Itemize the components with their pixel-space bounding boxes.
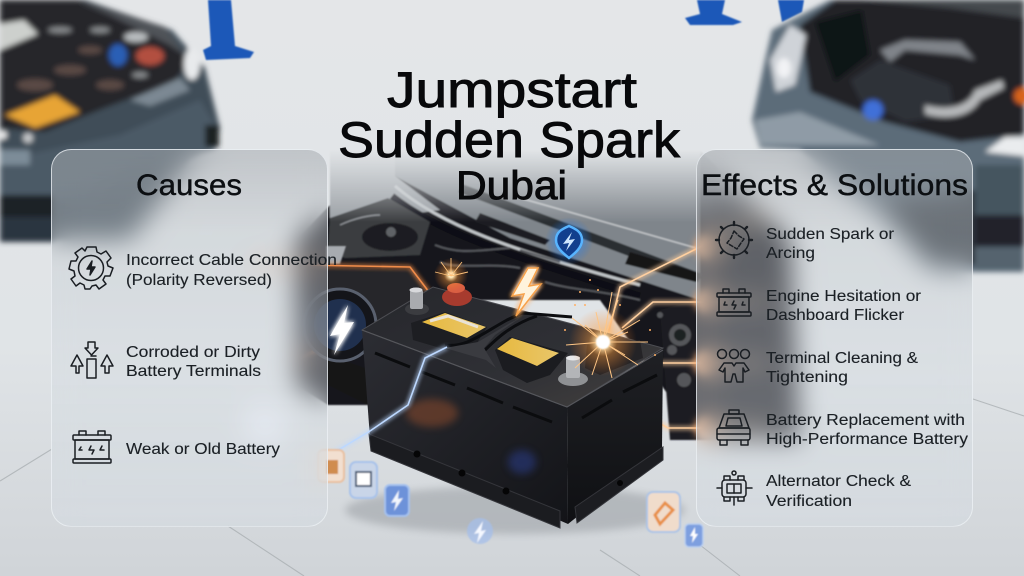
center lightning bolt xyxy=(512,268,541,316)
base ledges xyxy=(369,434,560,528)
heading: effects and solutions: Effects & Solutions xyxy=(701,169,968,202)
solution: terminal cleaning: Terminal Cleaning & xyxy=(766,350,918,367)
orange glows seen through the right panel xyxy=(694,235,720,440)
blue lift posts xyxy=(203,0,804,60)
solution: terminal cleaning: Tightening xyxy=(766,369,848,386)
solution: terminal cleaning xyxy=(718,350,918,386)
cause: incorrect cable connection: Incorrect Cable Connection xyxy=(126,252,337,269)
effect: engine hesitation: Engine Hesitation or xyxy=(766,288,922,305)
panel: causes xyxy=(51,149,328,527)
side faces xyxy=(362,330,568,524)
side lightning disc xyxy=(304,289,376,361)
car battery xyxy=(345,283,685,534)
cause: corroded terminals xyxy=(71,342,261,380)
large spark burst xyxy=(564,279,656,378)
solution: alternator check: Verification xyxy=(766,493,852,510)
effect: sudden spark: Sudden Spark or xyxy=(766,226,895,243)
terminal spark xyxy=(434,258,468,292)
cause: incorrect cable connection: (Polarity Reversed) xyxy=(126,272,272,289)
solution: battery replacement xyxy=(717,410,968,448)
soft glow under left panel xyxy=(243,403,287,447)
solution: alternator check xyxy=(717,471,911,510)
cause: incorrect cable connection xyxy=(69,247,337,289)
solution: alternator check: Alternator Check & xyxy=(766,473,911,490)
cause: corroded terminals: Battery Terminals xyxy=(126,363,261,380)
panel: effects and solutions xyxy=(696,149,973,527)
cause: corroded terminals: Corroded or Dirty xyxy=(126,344,260,361)
light patch behind spilled label text xyxy=(326,246,346,264)
right car xyxy=(752,0,1024,272)
cause: weak battery: Weak or Old Battery xyxy=(126,441,280,458)
floating floor icons xyxy=(318,450,703,547)
title: Sudden Spark xyxy=(338,112,681,168)
solution: battery replacement: High-Performance Battery xyxy=(766,431,968,448)
title: Dubai xyxy=(456,164,567,208)
connector strap xyxy=(445,313,572,345)
vents xyxy=(375,353,657,422)
engine bay xyxy=(296,150,800,440)
floor seams xyxy=(0,399,1024,576)
cause: weak battery xyxy=(73,431,280,463)
effect: sudden spark xyxy=(716,222,895,262)
blue shield bolt icon xyxy=(545,217,593,265)
solution: battery replacement: Battery Replacement with xyxy=(766,412,965,429)
left car xyxy=(0,0,220,242)
yellow labels xyxy=(422,313,486,338)
title: Jumpstart xyxy=(387,62,637,118)
effect: engine hesitation xyxy=(717,288,922,324)
raised covers xyxy=(411,312,487,350)
terminal posts xyxy=(405,283,588,386)
top face xyxy=(362,287,663,407)
blue electric arc xyxy=(335,347,447,452)
effect: engine hesitation: Dashboard Flicker xyxy=(766,307,905,324)
effect: sudden spark: Arcing xyxy=(766,245,815,262)
heading: causes: Causes xyxy=(136,169,242,202)
glowing orange connection lines xyxy=(250,212,770,428)
